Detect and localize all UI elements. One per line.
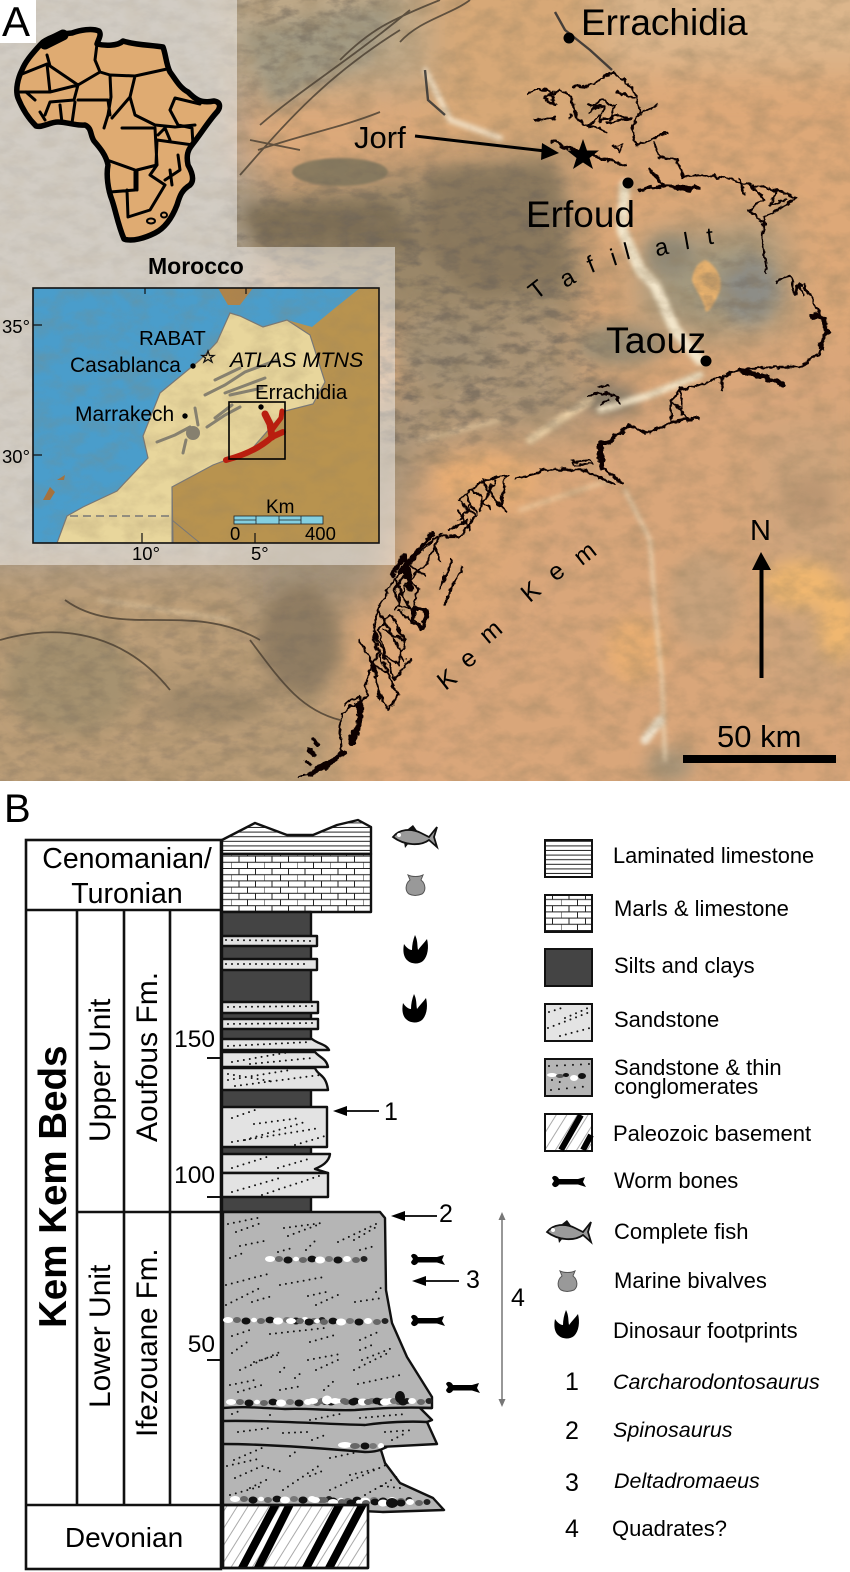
- icon: bone upper: [411, 1254, 445, 1265]
- region label: Kem Kem: e: [454, 643, 482, 674]
- arrow and label 2: [391, 1200, 453, 1228]
- heading: Upper Unit: Upper Unit: [84, 998, 117, 1142]
- legend labels: conglomerates: [614, 1074, 758, 1099]
- inset scale bar: Km: [266, 497, 294, 518]
- legend icon: footprint: [554, 1310, 579, 1338]
- legend numbers: 2: [565, 1417, 579, 1445]
- inset title: Morocco: Morocco: [148, 253, 244, 279]
- legend icon: bivalve: [558, 1271, 577, 1292]
- inset scale bar: 0: [230, 523, 240, 544]
- height scale: [174, 1026, 222, 1360]
- legend swatch: sandstone and thin conglomerates: [545, 1059, 592, 1096]
- north arrow: [750, 515, 771, 678]
- heading: Cenomanian/Turonian: Turonian: [71, 878, 183, 910]
- legend swatch: marls and limestone: [545, 895, 592, 932]
- region label: Tafilalt: a: [652, 233, 671, 262]
- legend labels: Complete fish: [614, 1219, 749, 1244]
- legend labels: Sandstone & thin: [614, 1055, 782, 1080]
- legend labels: Marine bivalves: [614, 1268, 767, 1293]
- legend icon: fish: [547, 1220, 591, 1243]
- legend swatch: silts and clays: [545, 949, 592, 986]
- map: Morocco inset: ATLAS MTNS: [228, 348, 364, 372]
- region label: Kem Kem: e: [542, 556, 570, 587]
- region label: Kem Kem: K: [432, 663, 463, 696]
- legend labels: [612, 843, 820, 1541]
- legend labels: Sandstone: [614, 1007, 719, 1032]
- heading: Lower Unit: Lower Unit: [84, 1264, 117, 1408]
- icon: footprint lower: [402, 994, 427, 1022]
- heading: Cenomanian/Turonian: Cenomanian/: [42, 843, 212, 875]
- white overlay behind inset maps: [0, 0, 395, 565]
- arrow and label 2: 2: [439, 1200, 453, 1228]
- icon: bone lower: [446, 1382, 480, 1393]
- map: Morocco inset: 5°: [251, 543, 269, 564]
- map: Morocco inset: 35°: [2, 316, 30, 337]
- sandstone dots: [226, 940, 325, 1195]
- inset scale bar: 400: [305, 523, 336, 544]
- region label: Tafilalt: a: [555, 263, 580, 293]
- scale bar: 50 km: [683, 719, 836, 763]
- map: Morocco inset: 10°: [132, 543, 160, 564]
- stratigraphic table: [26, 840, 221, 1569]
- heading: Ifezouane Fm.: Ifezouane Fm.: [131, 1248, 164, 1437]
- legend labels: Silts and clays: [614, 953, 755, 978]
- panel label B: B: [4, 787, 31, 831]
- icon: footprint upper: [403, 935, 428, 963]
- icon: Jorf star: [567, 139, 599, 169]
- legend numbers: [565, 1368, 579, 1543]
- place label and arrow: Jorf: [354, 120, 559, 160]
- legend labels: Laminated limestone: [613, 843, 814, 868]
- height scale: 150: [174, 1026, 215, 1053]
- unit: laminated limestone: [222, 820, 371, 854]
- unit: marls and limestone: [222, 854, 371, 912]
- legend labels: Quadrates?: [612, 1516, 727, 1541]
- legend icon: worm bone: [552, 1176, 586, 1187]
- icon: fish in column: [393, 825, 437, 848]
- map: Morocco inset: RABAT: [139, 327, 206, 350]
- legend swatch: Paleozoic basement: [545, 1114, 592, 1151]
- legend labels: Carcharodontosaurus: [613, 1370, 820, 1394]
- region label: Tafilalt: [523, 223, 715, 305]
- region label: Tafilalt: t: [705, 223, 715, 250]
- region label: Tafilalt: l: [682, 228, 692, 255]
- heading: Cenomanian/Turonian: [42, 843, 212, 910]
- map: Morocco inset: Casablanca: [70, 354, 181, 377]
- legend: [545, 840, 820, 1543]
- range arrow and label 4: 4: [511, 1284, 525, 1312]
- map: Morocco inset: 30°: [2, 446, 30, 467]
- region label: Kem Kem: m: [568, 536, 602, 571]
- icon: bivalve in column: [406, 875, 425, 896]
- place label: Taouz: Taouz: [606, 319, 706, 361]
- panel A: satellite map: [0, 0, 850, 830]
- legend swatch: sandstone: [545, 1004, 592, 1041]
- legend numbers: 4: [565, 1515, 579, 1543]
- region label: Tafilalt: l: [621, 238, 633, 265]
- legend labels: Worm bones: [614, 1168, 738, 1193]
- legend labels: Marls & limestone: [614, 896, 789, 921]
- height scale: 100: [174, 1162, 215, 1189]
- heading: Aoufous Fm.: Aoufous Fm.: [131, 972, 164, 1142]
- unit: silts and clays: [222, 912, 311, 1212]
- heading: Devonian: Devonian: [65, 1522, 183, 1553]
- lower sandstone dots: [226, 1217, 414, 1495]
- arrow and label 1: [333, 1098, 398, 1126]
- heading: Kem Kem Beds: Kem Kem Beds: [32, 1046, 75, 1328]
- region label: Tafilalt: f: [583, 251, 600, 279]
- outcrop outline: Kem Kem escarpment: [298, 72, 828, 777]
- inset scale bar: [230, 497, 336, 544]
- region label: Kem Kem: K: [515, 576, 546, 608]
- legend numbers: 1: [565, 1368, 579, 1396]
- unit: Paleozoic basement: [223, 1500, 368, 1572]
- place label: Errachidia: Errachidia: [581, 2, 748, 43]
- region label: Kem Kem: m: [474, 614, 508, 649]
- map: Morocco inset: Marrakech: [75, 403, 174, 426]
- legend labels: Paleozoic basement: [613, 1121, 811, 1146]
- region label: Tafilalt: i: [607, 244, 620, 272]
- unit: upper sandstone beds: [222, 936, 330, 1197]
- place label: Erfoud: Erfoud: [526, 194, 635, 235]
- arrow and label 3: 3: [466, 1266, 480, 1294]
- erosional surfaces: [223, 1407, 432, 1452]
- legend labels: Dinosaur footprints: [613, 1318, 798, 1343]
- region label: Tafilalt: T: [523, 275, 552, 305]
- region label: Kem Kem: [432, 536, 602, 696]
- icon: bone middle: [411, 1315, 445, 1326]
- unit: lower sandstone with conglomerates: [223, 1212, 444, 1512]
- legend numbers: 3: [565, 1469, 579, 1497]
- legend swatch: laminated limestone: [545, 840, 592, 877]
- legend labels: Spinosaurus: [613, 1418, 733, 1442]
- scale bar: 50 km: 50 km: [717, 719, 801, 754]
- legend labels: Deltadromaeus: [614, 1469, 760, 1493]
- map: Morocco inset: Errachidia: [255, 381, 348, 404]
- range arrow and label 4: [498, 1212, 525, 1407]
- map: Morocco inset: [2, 288, 379, 564]
- arrow and label 3: [412, 1266, 480, 1294]
- arrow and label 1: 1: [384, 1098, 398, 1126]
- stratigraphic column: [222, 820, 444, 1572]
- place label and arrow: Jorf: Jorf: [354, 120, 406, 155]
- conglomerate bands: [223, 1256, 432, 1508]
- map: Africa with country borders: [17, 30, 220, 240]
- height scale: 50: [188, 1331, 215, 1358]
- north arrow: N: [750, 515, 771, 547]
